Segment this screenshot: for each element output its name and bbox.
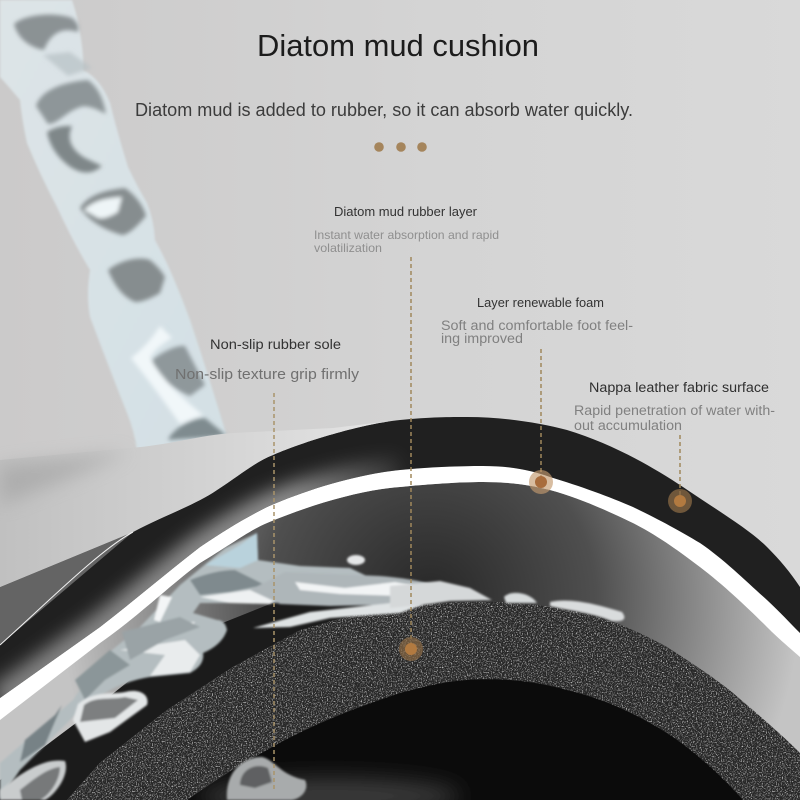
leader: nappa leather (679, 435, 681, 497)
callout: nappa leather: Nappa leather fabric surface (589, 380, 769, 395)
callout: diatom mud rubber layer: volatilization (314, 241, 382, 255)
callout: nappa leather: out accumulation (574, 418, 682, 433)
callout: nappa leather (574, 380, 775, 433)
leader: non-slip rubber sole (273, 393, 275, 790)
water droplets right (347, 555, 624, 621)
water droplets bottom (0, 691, 306, 800)
water column (0, 0, 227, 450)
callout: nappa leather: Rapid penetration of water with- (574, 403, 775, 418)
lower cavity gradient (0, 482, 800, 800)
water splash under cushion (0, 533, 440, 800)
title: Diatom mud cushion (257, 28, 539, 63)
decorative three dots (374, 142, 427, 152)
inner black arch (187, 679, 743, 800)
callout: non-slip rubber sole (175, 336, 360, 383)
callout: non-slip rubber sole: Non-slip rubber sole (210, 336, 341, 352)
marker: nappa dot (668, 489, 692, 513)
grey leather surface sheet (0, 420, 400, 645)
marker: foam dot (529, 470, 553, 494)
black rubber upper layer (0, 417, 800, 702)
callout: non-slip rubber sole: Non-slip texture grip firmly (175, 366, 360, 383)
dark grain layer (0, 596, 400, 800)
callout: renewable foam (441, 296, 633, 346)
callout: renewable foam: ing improved (441, 331, 523, 346)
leader: renewable foam (540, 349, 542, 478)
leader: diatom mud rubber layer (410, 257, 412, 645)
marker: rubber layer dot (399, 637, 423, 661)
callout: renewable foam: Soft and comfortable foot feel- (441, 318, 633, 333)
subtitle: Diatom mud is added to rubber, so it can absorb water quickly. (135, 100, 633, 120)
callout: diatom mud rubber layer (314, 205, 499, 255)
callout: diatom mud rubber layer: Instant water absorption and rapid (314, 228, 499, 242)
callout: renewable foam: Layer renewable foam (477, 296, 604, 310)
white foam band (0, 466, 800, 720)
foam layer (67, 602, 800, 800)
callout: diatom mud rubber layer: Diatom mud rubber layer (334, 205, 477, 219)
